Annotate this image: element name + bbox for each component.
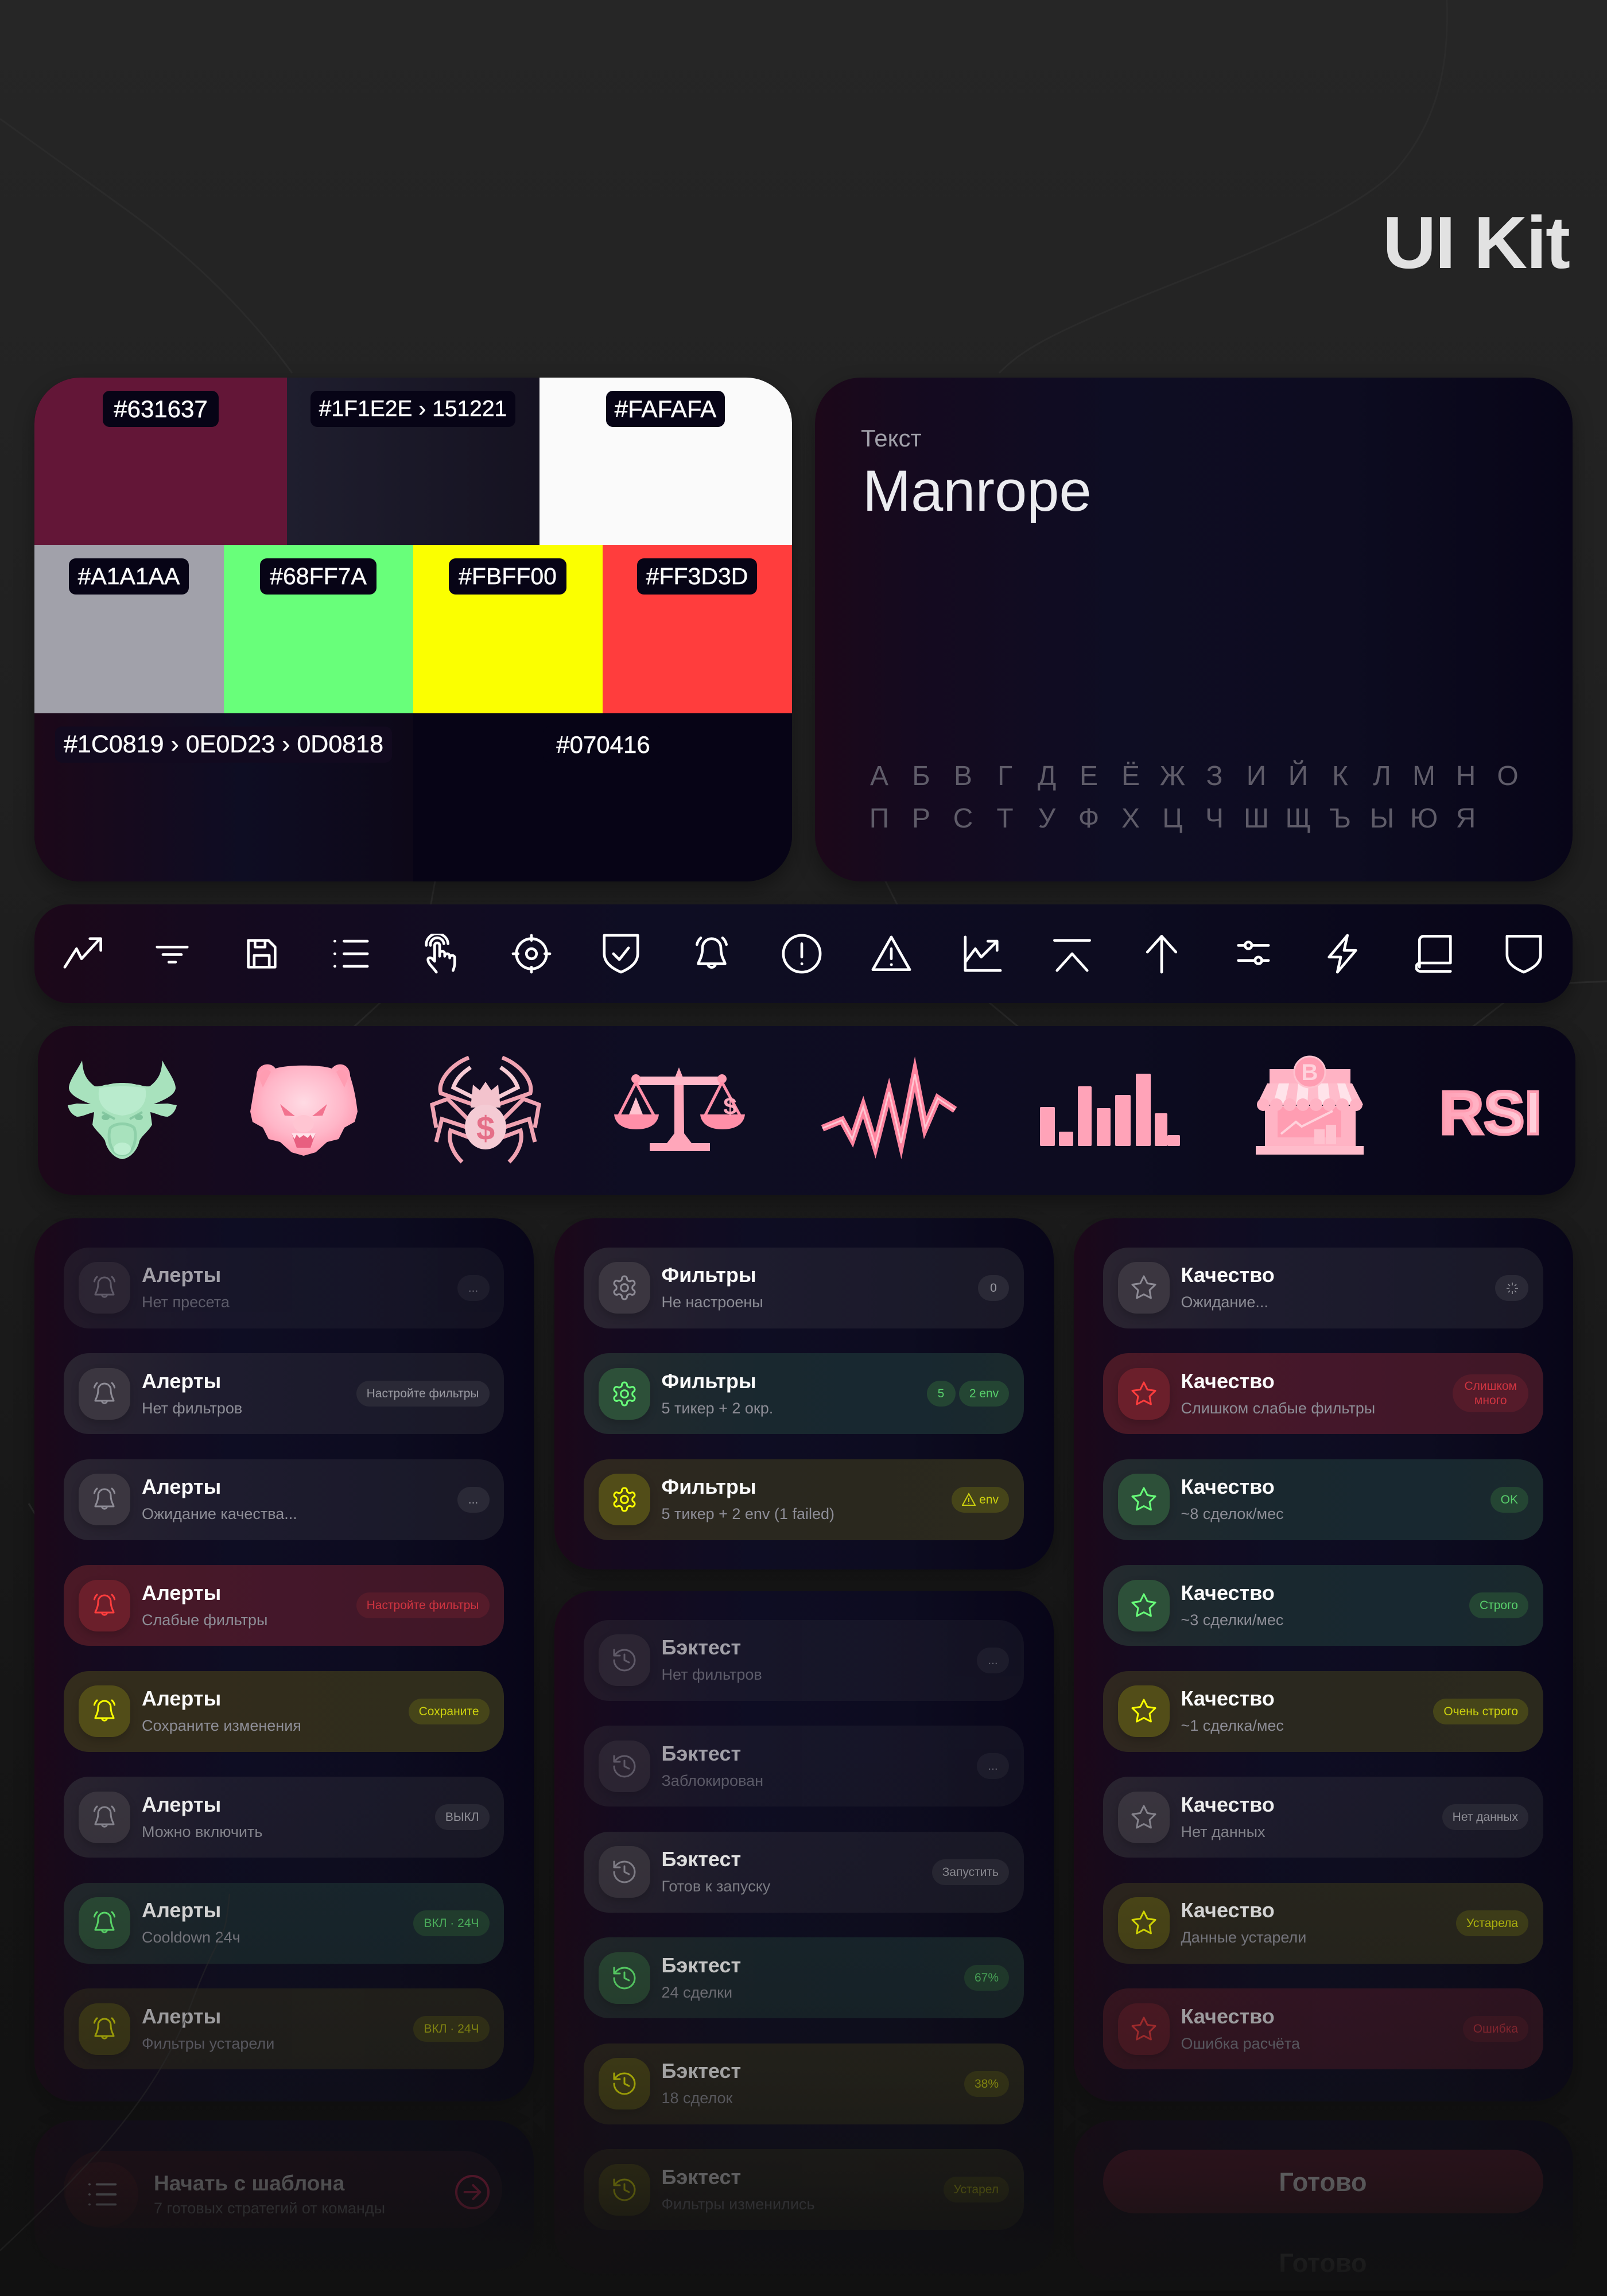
- alphabet line two: П: [870, 803, 889, 834]
- icon: scroll to top: [1053, 939, 1091, 972]
- badge: Настройте фильтры: [367, 1599, 479, 1612]
- panel: icon strip: [34, 904, 1573, 1003]
- row: backtest stale: [583, 2149, 1024, 2230]
- alphabet line two: Ш: [1244, 803, 1269, 834]
- panel: quality states: [1073, 1218, 1573, 2101]
- button: done primary: Готово: [1279, 2167, 1367, 2197]
- row title: Алерты: [142, 1793, 221, 1816]
- panel: illustrations: [38, 1026, 1575, 1195]
- alphabet line one: Е: [1080, 761, 1098, 791]
- badge env: 2 env: [969, 1387, 999, 1400]
- row title: Качество: [1181, 1369, 1275, 1392]
- icon tile: [1118, 1262, 1170, 1314]
- icon tile: [79, 1262, 130, 1314]
- alphabet line one: К: [1332, 761, 1348, 791]
- row title: Алерты: [142, 1898, 221, 1922]
- icon: alert circle: [782, 934, 822, 973]
- icon tile: [79, 2003, 130, 2054]
- alphabet line two: Я: [1456, 803, 1476, 834]
- icon tile: [598, 1474, 650, 1525]
- badge: ...: [988, 1654, 998, 1666]
- alphabet line one: Ж: [1160, 761, 1185, 791]
- label: 1F1E2E to 151221: [310, 391, 515, 427]
- font name: Manrope: Manrope: [863, 459, 1092, 523]
- badge: Нет данных: [1453, 1811, 1518, 1824]
- icon tile: [1118, 1792, 1170, 1843]
- panel: alerts states: [34, 1218, 534, 2101]
- badge: [413, 2016, 489, 2042]
- row title: Качество: [1181, 2004, 1275, 2028]
- badge: spinner: [1495, 1275, 1528, 1300]
- illustration: spider with dollar: $: [476, 1110, 495, 1147]
- row: alerts no preset: [64, 1248, 504, 1328]
- label: gradient stops: #1C0819 › 0E0D23 › 0D0818: [64, 731, 383, 758]
- row subtitle: Фильтры изменились: [661, 2196, 815, 2213]
- illustration: bull: [68, 1060, 177, 1159]
- badge: Очень строго: [1443, 1704, 1518, 1718]
- button title: Начать с шаблона: [154, 2171, 344, 2195]
- row: filters not set: [583, 1248, 1024, 1328]
- icon: alarm bell: [696, 937, 728, 969]
- badge: [977, 1647, 1009, 1673]
- badge: Строго: [1480, 1599, 1518, 1612]
- icon: filter: [156, 946, 189, 964]
- row: alerts stale filters: [64, 1988, 504, 2069]
- row subtitle: Нет данных: [1181, 1823, 1265, 1840]
- icon: book: [1415, 934, 1455, 974]
- icon tile: [1118, 1474, 1170, 1525]
- label: FBFF00: #FBFF00: [459, 563, 557, 589]
- illustration: bear: [38, 1026, 1575, 1195]
- alphabet line one: О: [1497, 761, 1519, 791]
- illustration: pulse wave: [38, 1026, 1575, 1195]
- swatch: white: [539, 378, 792, 545]
- badge: [944, 2177, 1009, 2202]
- label: Текст: Текст: [861, 425, 922, 452]
- label: FAFAFA: [606, 391, 725, 427]
- row title: Алерты: [142, 1580, 221, 1605]
- icon tile: [1118, 2003, 1170, 2054]
- row subtitle: Сохраните изменения: [142, 1717, 301, 1734]
- row: alerts can enable: [64, 1777, 504, 1858]
- alphabet line one: З: [1206, 761, 1222, 791]
- row: quality too weak: [1103, 1353, 1543, 1434]
- row title: Качество: [1181, 1475, 1275, 1498]
- row subtitle: Не настроены: [661, 1293, 763, 1311]
- panel: template card: [34, 2120, 534, 2270]
- row subtitle: Ожидание качества...: [142, 1505, 297, 1522]
- panel: filters states: [554, 1218, 1054, 1569]
- alphabet line one: Ё: [1121, 761, 1140, 791]
- row: quality strict: [1103, 1565, 1543, 1646]
- row: backtest blocked: [583, 1726, 1024, 1807]
- badge: Слишком: [1464, 1380, 1517, 1393]
- row subtitle: Нет фильтров: [661, 1666, 762, 1683]
- label: 070416: [543, 727, 663, 763]
- icon: arrow up: [1146, 935, 1178, 973]
- badge: [356, 1592, 489, 1618]
- icon tile: [1118, 1368, 1170, 1420]
- alphabet line one: Й: [1288, 761, 1308, 791]
- panel: colour palette: [34, 378, 792, 881]
- badge: [932, 1859, 1009, 1885]
- badge: Сохраните: [419, 1704, 479, 1718]
- row title: Фильтры: [661, 1263, 756, 1287]
- badge 5: [926, 1381, 955, 1407]
- panel: done buttons: [1073, 2120, 1573, 2281]
- alphabet line two: С: [953, 803, 973, 834]
- badge: env: [979, 1493, 999, 1506]
- illustration: scales: [38, 1026, 1575, 1195]
- icon tile: [598, 1634, 650, 1686]
- row: quality very strict: [1103, 1671, 1543, 1751]
- row: alerts weak filters: [64, 1565, 504, 1646]
- badge: [457, 1275, 489, 1300]
- swatch: green: [224, 545, 413, 713]
- row subtitle: 5 тикер + 2 env (1 failed): [661, 1505, 834, 1522]
- button: start from template: [64, 2151, 502, 2228]
- badge: OK: [1501, 1493, 1518, 1506]
- badge: ВКЛ · 24Ч: [424, 2022, 479, 2035]
- alphabet line two: Р: [912, 803, 930, 834]
- label: FF3D3D: [637, 558, 757, 595]
- badge: Устарела: [1466, 1917, 1518, 1929]
- swatch: red: [603, 545, 792, 713]
- badge: ВЫКЛ: [445, 1811, 479, 1824]
- alphabet line two: Ч: [1205, 803, 1224, 834]
- illustration: bitcoin shop: B: [1302, 1060, 1318, 1085]
- row title: Качество: [1181, 1580, 1275, 1605]
- icon tile: [79, 1685, 130, 1737]
- row title: Бэктест: [661, 1635, 741, 1659]
- title: UI Kit: UI Kit: [1383, 201, 1569, 284]
- badge: [978, 1275, 1009, 1300]
- alphabet line two: У: [1038, 803, 1055, 834]
- label: 1F1E2E to 151221: #1F1E2E › 151221: [319, 397, 507, 421]
- button: done secondary: Готово: [1279, 2248, 1367, 2278]
- label: 070416: #070416: [556, 731, 650, 758]
- icon: chart growth: [964, 935, 1002, 972]
- alphabet line one: В: [954, 761, 972, 791]
- badge: [409, 1699, 489, 1724]
- row subtitle: Нет пресета: [142, 1293, 230, 1311]
- icon tile: list: [65, 2162, 138, 2227]
- row subtitle: Можно включить: [142, 1823, 262, 1840]
- badge: [457, 1486, 489, 1513]
- row: alerts cooldown: [64, 1882, 504, 1964]
- row: alerts waiting: [64, 1459, 504, 1540]
- label: A1A1AA: #A1A1AA: [78, 563, 180, 589]
- row title: Качество: [1181, 1687, 1275, 1710]
- row title: Фильтры: [661, 1475, 756, 1498]
- swatch: background gradient: [34, 713, 413, 881]
- badge: [1456, 1910, 1528, 1936]
- badge 5: 5: [938, 1387, 944, 1400]
- row title: Алерты: [142, 1687, 221, 1710]
- row: alerts no filters: [64, 1353, 504, 1434]
- row title: Бэктест: [661, 1953, 741, 1976]
- swatch: burgundy: [34, 378, 287, 545]
- illustration: spider with dollar: [38, 1026, 1575, 1195]
- alphabet line one: И: [1247, 761, 1266, 791]
- alphabet line one: Н: [1456, 761, 1476, 791]
- row: quality waiting: [1103, 1248, 1543, 1328]
- label: 631637: [103, 391, 219, 427]
- badge: [1469, 1592, 1528, 1618]
- row subtitle: Данные устарели: [1181, 1929, 1306, 1946]
- alphabet line two: Ц: [1162, 803, 1183, 834]
- row subtitle: ~1 сделка/мес: [1181, 1717, 1284, 1734]
- row: filters ok: [583, 1353, 1024, 1434]
- panel: backtest states: [554, 1591, 1054, 2274]
- alphabet line two: Ю: [1410, 803, 1438, 834]
- row: filters partial failure: [583, 1459, 1024, 1540]
- alphabet line two: Ы: [1370, 803, 1394, 834]
- swatch: deep navy: [413, 713, 792, 881]
- alphabet line one: Г: [997, 761, 1012, 791]
- row title: Качество: [1181, 1898, 1275, 1922]
- badge: [413, 1910, 489, 1936]
- alphabet line one: Б: [912, 761, 930, 791]
- row title: Бэктест: [661, 2059, 741, 2083]
- row subtitle: Фильтры устарели: [142, 2035, 274, 2052]
- badge: ...: [468, 1281, 478, 1295]
- icon: shield check: [603, 934, 639, 973]
- row subtitle: Заблокирован: [661, 1772, 763, 1789]
- row subtitle: Cooldown 24ч: [142, 1929, 240, 1946]
- alphabet line one: А: [870, 761, 888, 791]
- row: alerts save changes: [64, 1671, 504, 1751]
- illustration: RSI: RSI: [1439, 1078, 1542, 1147]
- label: 68FF7A: [260, 558, 376, 595]
- badge: [964, 2070, 1009, 2097]
- row title: Фильтры: [661, 1369, 756, 1392]
- badge: [1453, 1374, 1528, 1412]
- alphabet line one: Д: [1038, 761, 1056, 791]
- alphabet line one: [870, 760, 1519, 791]
- alphabet line one: Л: [1373, 761, 1391, 791]
- row subtitle: 18 сделок: [661, 2089, 732, 2107]
- badge: [435, 1804, 489, 1830]
- row subtitle: 24 сделки: [661, 1983, 732, 2000]
- swatch: grey: [34, 545, 224, 713]
- row subtitle: Готов к запуску: [661, 1878, 770, 1895]
- icon tile: [1118, 1579, 1170, 1631]
- icon tile: [79, 1474, 130, 1525]
- illustration: bar chart: [38, 1026, 1575, 1195]
- badge: 67%: [975, 1971, 999, 1984]
- badge: Настройте фильтры: [367, 1387, 479, 1400]
- button subtitle: 7 готовых стратегий от команды: [154, 2200, 385, 2217]
- icon tile: [79, 1792, 130, 1843]
- row: quality ok: [1103, 1459, 1543, 1540]
- label: FAFAFA: #FAFAFA: [615, 395, 716, 422]
- row: quality stale: [1103, 1882, 1543, 1964]
- alphabet line one: М: [1412, 761, 1435, 791]
- icon tile: [598, 1262, 650, 1314]
- icon: tap hand: [425, 934, 456, 973]
- button: done primary: [1103, 2150, 1543, 2213]
- icon: target: [512, 934, 551, 973]
- row: backtest ready: [583, 1832, 1024, 1912]
- alphabet line two: Ф: [1078, 803, 1099, 834]
- label: A1A1AA: [69, 558, 189, 595]
- alphabet line two: Х: [1121, 803, 1140, 834]
- alphabet line two: Т: [996, 803, 1014, 834]
- row title: Качество: [1181, 1263, 1275, 1287]
- badge: [977, 1753, 1009, 1779]
- row: quality no data: [1103, 1777, 1543, 1858]
- row: backtest 18 trades: [583, 2043, 1024, 2124]
- alphabet line two: [870, 803, 1476, 834]
- icon: shield: [1504, 934, 1544, 974]
- label: FF3D3D: #FF3D3D: [646, 563, 748, 589]
- icon tile: [79, 1579, 130, 1631]
- row subtitle: Ошибка расчёта: [1181, 2035, 1300, 2052]
- badge: Запустить: [942, 1865, 999, 1879]
- badge: Ошибка: [1473, 2022, 1518, 2035]
- icon: arrow circle: [454, 2174, 491, 2210]
- row title: Алерты: [142, 1369, 221, 1392]
- icon: sliders: [1232, 934, 1272, 974]
- badge: [1433, 1699, 1528, 1724]
- badge env: [959, 1381, 1009, 1407]
- icon: save: [247, 939, 277, 969]
- badge: много: [1474, 1394, 1507, 1407]
- row subtitle: Слишком слабые фильтры: [1181, 1399, 1375, 1416]
- badge: 38%: [975, 2077, 999, 2090]
- icon tile: [598, 2163, 650, 2215]
- icon tile: [598, 1952, 650, 2004]
- alphabet line two: Ъ: [1329, 803, 1351, 834]
- icon: trend up: [63, 937, 102, 969]
- row title: Качество: [1181, 1793, 1275, 1816]
- icon tile: [79, 1897, 130, 1949]
- badge: [964, 1965, 1009, 1991]
- badge: ...: [988, 1759, 998, 1773]
- badge: [1490, 1486, 1528, 1513]
- badge: [1463, 2016, 1528, 2042]
- row title: Алерты: [142, 1475, 221, 1498]
- label: FBFF00: [449, 558, 566, 595]
- badge: ...: [468, 1493, 478, 1506]
- label: 68FF7A: #68FF7A: [270, 563, 367, 589]
- row title: Бэктест: [661, 1847, 741, 1871]
- icon tile: [1118, 1897, 1170, 1949]
- row subtitle: Нет фильтров: [142, 1399, 242, 1416]
- illustration: bitcoin shop: [38, 1026, 1575, 1195]
- icon: list: [333, 940, 368, 968]
- icon tile: [79, 1368, 130, 1420]
- illustration: scales: $: [723, 1093, 737, 1120]
- row subtitle: Слабые фильтры: [142, 1611, 267, 1629]
- label: 631637: #631637: [114, 395, 208, 422]
- icon tile: [598, 1740, 650, 1792]
- badge: ВКЛ · 24Ч: [424, 1917, 479, 1929]
- swatch: dark surface gradient: [287, 378, 539, 545]
- row title: Бэктест: [661, 2165, 741, 2189]
- icon tile: [1118, 1685, 1170, 1737]
- icon: warning triangle: [871, 935, 911, 971]
- row: backtest no filters: [583, 1619, 1024, 1701]
- alphabet line two: Щ: [1286, 803, 1311, 834]
- badge: [952, 1486, 1009, 1513]
- row title: Алерты: [142, 1263, 221, 1287]
- icon tile: [598, 2058, 650, 2109]
- icon tile: [598, 1846, 650, 1898]
- panel: typography: [815, 378, 1573, 881]
- row: backtest 24 trades: [583, 1937, 1024, 2018]
- badge: [356, 1381, 489, 1407]
- row title: Бэктест: [661, 1741, 741, 1765]
- row subtitle: Ожидание...: [1181, 1293, 1268, 1311]
- row subtitle: ~3 сделки/мес: [1181, 1611, 1283, 1629]
- swatch: yellow: [413, 545, 603, 713]
- icon tile: [598, 1368, 650, 1420]
- row subtitle: 5 тикер + 2 окр.: [661, 1399, 773, 1416]
- badge: 0: [990, 1281, 997, 1295]
- badge: [1442, 1804, 1528, 1830]
- row title: Алерты: [142, 2004, 221, 2028]
- row subtitle: ~8 сделок/мес: [1181, 1505, 1284, 1522]
- icon: lightning: [1322, 934, 1363, 974]
- badge: Устарел: [954, 2183, 999, 2196]
- row: quality error: [1103, 1988, 1543, 2069]
